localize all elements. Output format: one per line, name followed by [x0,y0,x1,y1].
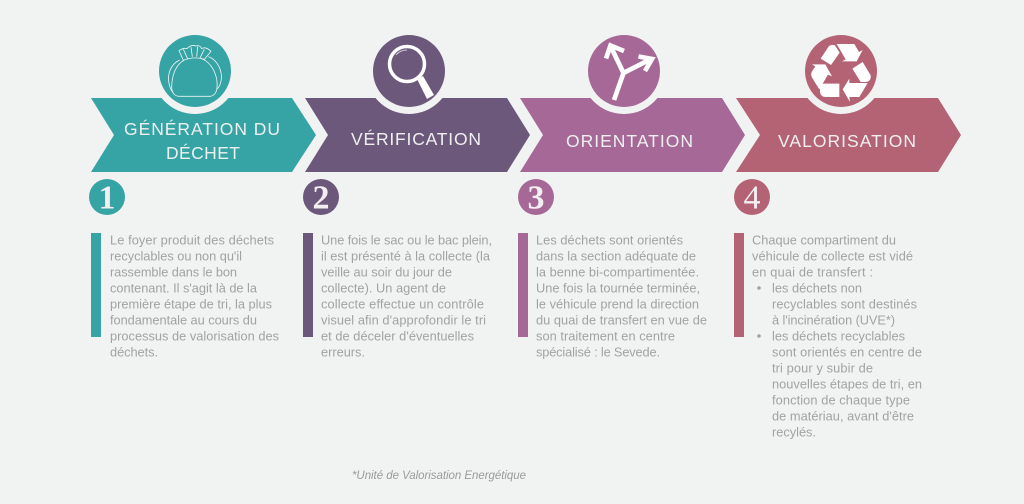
number badge 3 [518,179,554,216]
heading: vérification: VÉRIFICATION [351,129,481,149]
text block 4: sont orientés en centre de [772,344,922,360]
text block 1: processus de valorisation des [110,328,279,344]
text block 1: fondamentale au cours du [110,312,257,328]
text block 4: de matériau, avant d'être [772,408,914,424]
text block 4: Chaque compartiment du [752,232,896,248]
text block 3 [536,232,707,360]
icon: magnifying glass [366,28,452,114]
number badge 1: 1 [98,180,116,216]
chevron 1 [91,98,316,172]
accent bar 4 [734,233,744,337]
text block 1: contenant. Il s'agit là de la [110,280,258,296]
heading: génération du déchet: GÉNÉRATION DU [124,119,280,139]
text block 2: collecte). Un agent de [321,280,446,296]
step 4: valorisation [734,28,961,440]
text block 1: rassemble dans le bon [110,264,237,280]
text block 4: les déchets recyclables [772,328,905,344]
text block 4: les déchets non [772,280,862,296]
chevron 2 [305,98,530,172]
text block 3: du quai de transfert en vue de [536,312,707,328]
text block 2: Une fois le sac ou le bac plein, [321,232,492,248]
text block 4: recylés. [772,424,816,440]
text block 4: nouvelles étapes de tri, en [772,376,922,392]
step 1: génération du déchet [89,28,316,360]
number badge 4 [734,179,770,216]
icon: recycling symbol [798,28,884,114]
text block 2: collecte effectue un contrôle [321,296,484,312]
text block 2: visuel afin d'approfondir le tri [321,312,486,328]
chevron 4 [736,98,961,172]
text block 4: véhicule de collecte est vidé [752,248,913,264]
text block 3: son traitement en centre [536,328,675,344]
text block 4 [752,232,922,440]
text block 1: première étape de tri, la plus [110,296,272,312]
icon: waste bag [152,28,238,114]
text block 4: tri pour y subir de [772,360,873,376]
text block 1: recyclables ou non qu'il [110,248,242,264]
heading: valorisation: VALORISATION [778,131,916,151]
text block 3: Une fois la tournée terminée, [536,280,700,296]
text block 3: spécialisé : le Sevede. [536,344,660,360]
text block 2: et de déceler d'éventuelles [321,328,474,344]
number badge 3: 3 [528,180,544,216]
text block 2: il est présenté à la collecte (la [321,248,491,264]
step 3: orientation [518,28,745,360]
heading: orientation: ORIENTATION [566,131,693,151]
text block 2: erreurs. [321,344,365,360]
text block 3: la benne bi-compartimentée. [536,264,699,280]
text block 4: en quai de transfert : [752,264,873,280]
accent bar 2 [303,233,313,337]
footnote: *Unité de Valorisation Energétique [352,470,526,482]
number badge 2 [303,179,339,216]
number badge 2: 2 [312,180,330,216]
text block 1: déchets. [110,344,158,360]
number badge 4: 4 [744,180,760,216]
heading: génération du déchet: DÉCHET [166,143,240,163]
text block 2 [321,232,492,360]
text block 3: Les déchets sont orientés [536,232,683,248]
step 2: vérification [303,28,530,360]
text block 1 [110,232,279,360]
text block 3: le véhicule prend la direction [536,296,699,312]
number badge 1 [89,179,125,216]
text block 2: veille au soir du jour de [321,264,452,280]
text block 4: fonction de chaque type [772,392,910,408]
text block 4: à l'incinération (UVE*) [772,312,895,328]
text block 1: Le foyer produit des déchets [110,232,274,248]
text block 3: dans la section adéquate de [536,248,696,264]
heading: génération du déchet [124,119,280,163]
icon: diverging arrows [581,28,667,114]
text block 4: recyclables sont destinés [772,296,917,312]
chevron 3 [520,98,745,172]
accent bar 3 [518,233,528,337]
accent bar 1 [91,233,101,337]
